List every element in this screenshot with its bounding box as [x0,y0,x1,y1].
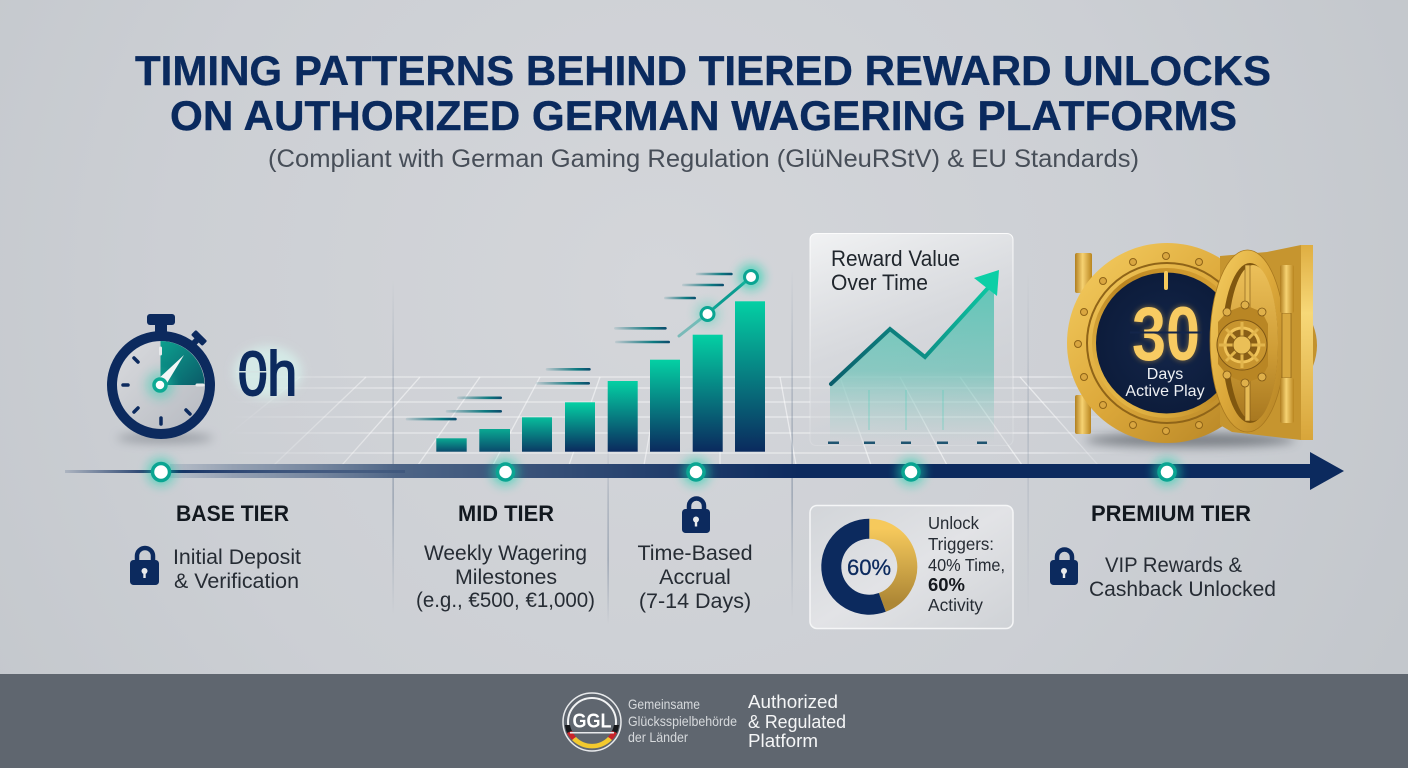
text: mid tier description: Milestones [455,565,557,589]
icon: stopwatch [112,314,213,443]
text: time-based accrual: (7-14 Days) [639,589,751,613]
counter caption: Days [1147,366,1183,383]
text: unlock triggers [928,513,1005,615]
text: authorized and regulated platform: & Regulated [748,711,846,732]
tier heading: base: BASE TIER [176,501,289,526]
digital counter: 30: 30 [1132,292,1200,377]
text: time-based accrual [637,541,753,613]
text: time-based accrual: Accrual [659,565,731,589]
icon: gold vault with 30 days counter [1067,243,1317,447]
timeline node: premium tier [1153,458,1181,486]
timeline node: mid tier [491,458,519,486]
text: authorized and regulated platform: Platform [748,730,818,751]
logo: GGL badge: GGL [572,710,612,732]
title: TIMING PATTERNS BEHIND TIERED REWARD UNLOCKS [135,47,1271,94]
timeline node: triggers [897,458,925,486]
text: unlock triggers: Activity [928,595,983,615]
text: authority name: der Länder [628,729,688,745]
axis ticks [828,441,987,444]
text: authority name [628,696,737,745]
text: authorized and regulated platform: Authorized [748,691,838,712]
vault door [1210,245,1317,440]
counter caption [1125,366,1205,400]
text: authority name: Glücksspielbehörde [628,713,737,729]
footer bar [0,674,1408,768]
timeline node: base tier [147,458,175,486]
text: premium tier description: Cashback Unlocked [1089,577,1276,601]
text: unlock triggers: 40% Time, [928,555,1005,575]
donut chart: 60% [847,555,891,580]
text: mid tier description: (e.g., €500, €1,000) [416,588,595,612]
tier heading: premium: PREMIUM TIER [1091,501,1251,526]
panel: unlock triggers [810,506,1013,628]
digital readout: 0h: 0h [238,340,297,409]
text: authority name: Gemeinsame [628,696,700,712]
tier heading: mid: MID TIER [458,501,554,526]
text: mid tier description: Weekly Wagering [424,541,587,565]
donut chart [831,529,907,605]
text: mid tier description [416,541,595,612]
chart heading: Over Time [831,270,928,295]
text: premium tier description: VIP Rewards & [1105,553,1242,577]
subtitle: (Compliant with German Gaming Regulation (GlüNeuRStV) & EU Standards) [268,145,1139,173]
area chart: reward value [830,284,994,442]
counter caption: Active Play [1125,383,1205,400]
digital counter: 30: 30 [1132,292,1200,377]
vault rivets [1074,252,1202,434]
text: unlock triggers: Unlock [928,513,979,533]
text: base tier description [173,545,301,593]
title [135,47,1271,139]
text: unlock triggers: 60% [928,574,965,595]
chart heading: Reward Value [831,246,960,271]
text: unlock triggers: Triggers: [928,534,994,554]
chart heading [831,246,960,295]
text: time-based accrual: Time-Based [637,541,753,565]
icon: lock premium tier [1050,550,1078,585]
panel: reward value over time [810,234,1013,446]
timeline node: time-based [682,458,710,486]
text: premium tier description [1089,553,1276,601]
timeline arrow [65,452,1344,490]
text: base tier description: Initial Deposit [173,545,301,569]
icon: lock base tier [130,548,159,585]
icon: lock time-based [682,498,710,533]
trend line with arrow [831,270,999,384]
text: authorized and regulated platform [748,691,846,751]
logo: GGL badge [563,693,621,751]
text: base tier description: & Verification [174,569,299,593]
title: ON AUTHORIZED GERMAN WAGERING PLATFORMS [170,92,1237,139]
bar chart: wagering milestones [406,264,765,452]
